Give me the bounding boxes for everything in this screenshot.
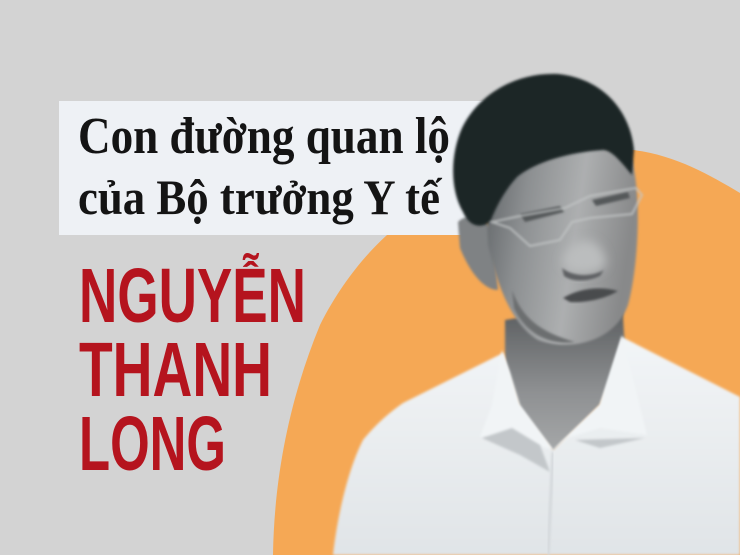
eyes and brows — [520, 192, 630, 222]
name line 1: NGUYỄN — [79, 252, 306, 339]
title line 2: của Bộ trưởng Y tế — [78, 169, 443, 225]
ear — [458, 217, 498, 290]
white shirt — [333, 337, 740, 555]
nose — [562, 241, 606, 274]
name heading — [79, 252, 306, 487]
portrait of the minister — [333, 74, 740, 555]
hair — [453, 74, 634, 226]
placket line — [548, 452, 553, 555]
name line 3: LONG — [79, 401, 226, 487]
nose shadow — [562, 268, 604, 280]
name line 2: THANH — [79, 327, 272, 413]
glasses — [492, 188, 642, 246]
mouth — [563, 288, 618, 302]
collar shadow — [482, 428, 645, 472]
jaw shadow — [512, 290, 575, 343]
title panel — [59, 101, 484, 235]
shirt collar — [480, 335, 647, 450]
orange circle — [273, 149, 740, 555]
face — [486, 145, 638, 345]
title line 1: Con đường quan lộ — [78, 108, 450, 165]
neck — [505, 300, 625, 452]
